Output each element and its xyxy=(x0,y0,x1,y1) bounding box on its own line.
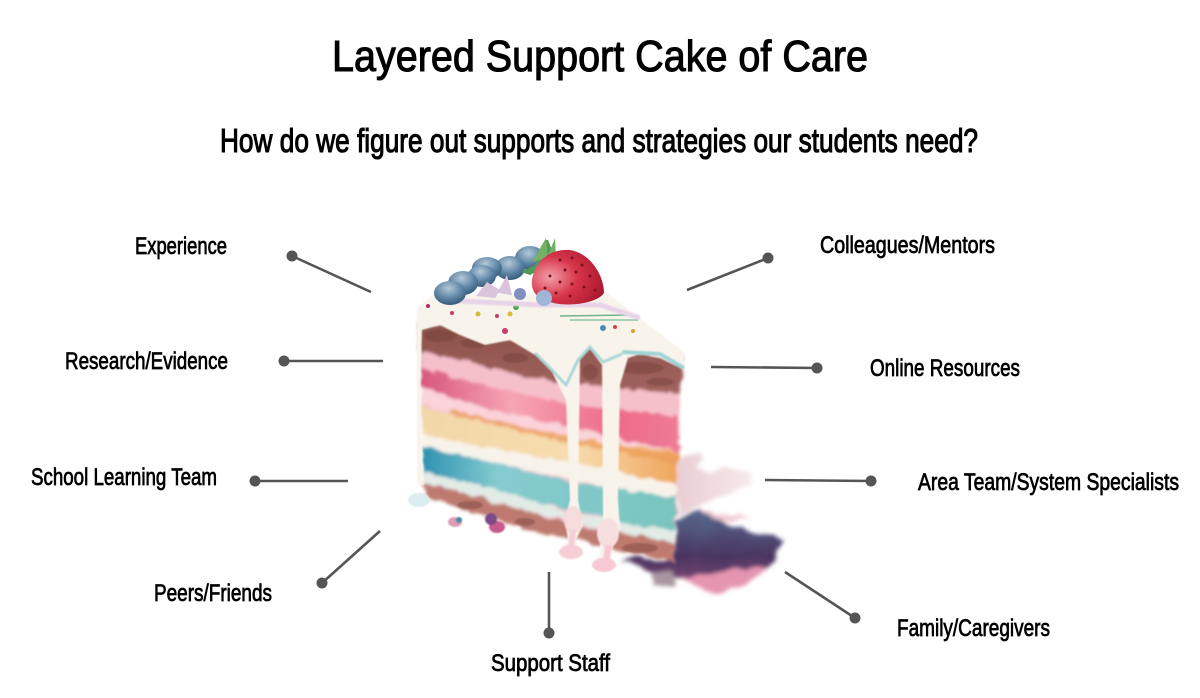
sprinkles xyxy=(426,300,640,334)
callout: Area Team/System Specialists xyxy=(765,469,1179,496)
strawberry xyxy=(521,238,604,306)
blueberries xyxy=(434,246,545,305)
cake layers xyxy=(419,322,683,563)
callout: Online Resources xyxy=(711,355,1020,382)
connector xyxy=(765,480,871,481)
connector xyxy=(284,360,383,362)
dot xyxy=(250,476,260,486)
callout: Colleagues/Mentors xyxy=(687,232,995,290)
icing with drips xyxy=(408,293,684,572)
dot xyxy=(866,476,876,486)
paint splash behind cake xyxy=(622,452,787,595)
title: Layered Support Cake of Care xyxy=(332,32,868,81)
label: Peers/Friends xyxy=(154,580,272,607)
dot xyxy=(286,250,298,262)
dot xyxy=(278,356,290,366)
callout: Experience xyxy=(135,233,371,292)
callout: Research/Evidence xyxy=(65,348,383,375)
label: Colleagues/Mentors xyxy=(820,232,995,259)
dot xyxy=(316,578,328,588)
connector xyxy=(548,572,550,633)
illustration: watercolor cake slice xyxy=(408,238,787,595)
connector xyxy=(322,531,380,583)
crumb texture xyxy=(424,330,674,553)
connector xyxy=(255,480,348,482)
callout: Peers/Friends xyxy=(154,531,380,607)
crumbs on table xyxy=(448,513,505,533)
dot xyxy=(812,362,822,374)
connector xyxy=(785,572,855,618)
dot xyxy=(762,252,774,264)
connector xyxy=(292,256,371,292)
label: Online Resources xyxy=(870,355,1020,382)
label: Support Staff xyxy=(491,650,610,677)
connector xyxy=(711,367,817,368)
subtitle: How do we figure out supports and strategies our students need? xyxy=(220,122,978,159)
label: Family/Caregivers xyxy=(897,615,1050,642)
dot xyxy=(544,628,554,638)
label: Research/Evidence xyxy=(65,348,228,375)
callout: Family/Caregivers xyxy=(785,572,1050,642)
dot xyxy=(850,612,860,624)
label: Experience xyxy=(135,233,227,260)
callout: Support Staff xyxy=(491,572,610,677)
callout: School Learning Team xyxy=(31,464,348,491)
label: School Learning Team xyxy=(31,464,217,491)
connector xyxy=(687,258,768,290)
